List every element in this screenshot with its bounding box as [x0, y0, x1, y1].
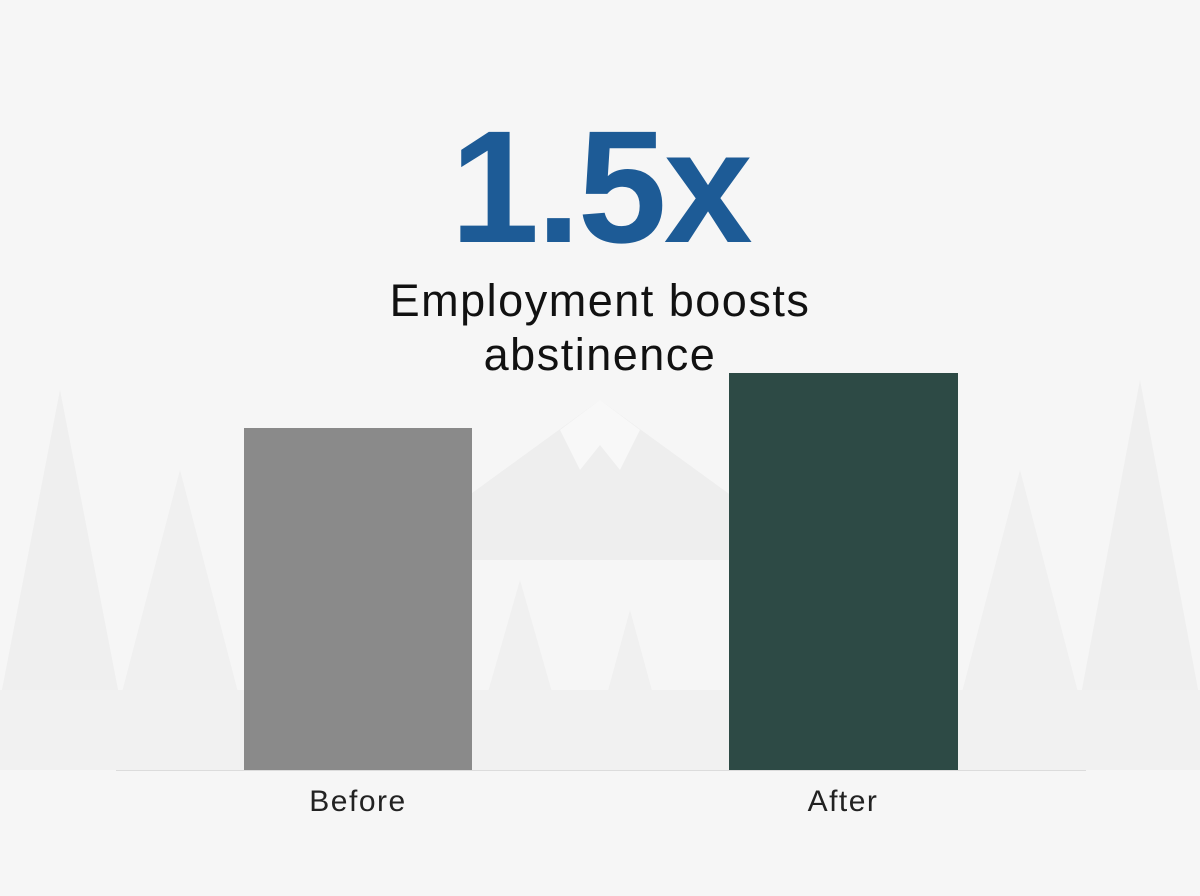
label: after: After	[808, 785, 878, 818]
bar chart	[116, 373, 1086, 818]
label: before: Before	[309, 785, 407, 818]
subtitle: abstinence	[484, 329, 716, 380]
headline: 1.5x: 1.5x	[450, 97, 750, 276]
bar: after	[729, 373, 958, 770]
subtitle: Employment boosts	[390, 275, 810, 326]
bar: before	[244, 428, 472, 770]
subtitle	[390, 275, 810, 380]
